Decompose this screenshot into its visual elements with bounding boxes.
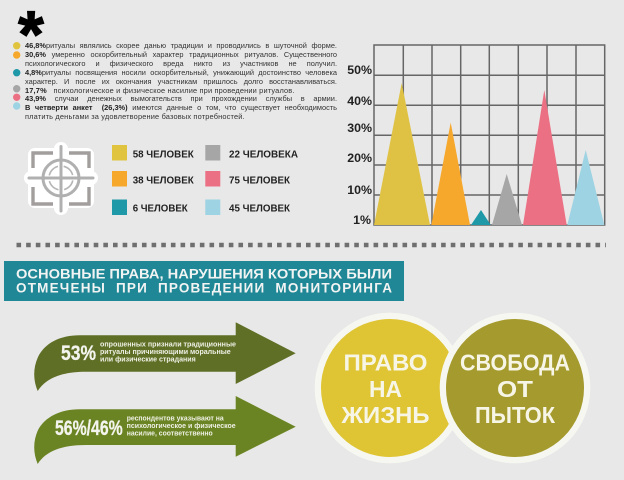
banner: section heading: [4, 261, 404, 301]
legend dots for notes: [13, 42, 20, 110]
text block: survey notes: 17,7% психологическое и физическое насилие при проведении ритуалов.: [25, 86, 295, 94]
chart: triangle percentages: 1%: [353, 213, 371, 227]
arrow: 53 percent: опрошенных признали традиционные: [100, 342, 236, 349]
legend: people counts: 45 ЧЕЛОВЕК: [229, 204, 291, 214]
arrow: 53 percent: ритуалы причиняющими моральные: [100, 349, 231, 356]
circle: right to life: ПРАВО: [344, 350, 428, 376]
text block: survey notes: 4,8%ритуалы посвящения носили оскорбительный, унижающий достоинство человека: [25, 68, 337, 77]
chart: triangle percentages: [347, 45, 605, 227]
text block: survey notes: В четверти анкет (26,3%) имеются данные о том, что существует необходимость: [25, 103, 337, 112]
icon: crosshair target: [28, 146, 94, 211]
text block: survey notes: [25, 41, 337, 120]
legend: people counts: 75 ЧЕЛОВЕК: [229, 176, 291, 186]
arrow: 53 percent: 53%: [61, 342, 96, 365]
circle: right to life: НА: [369, 376, 402, 402]
circle: right to life: [315, 313, 465, 463]
circle: freedom from torture: СВОБОДА: [460, 350, 570, 376]
circle: freedom from torture: ОТ: [497, 376, 533, 402]
text block: survey notes: 46,8%ритуалы являлись скорее данью традиции и проводились в шуточной форме.: [25, 41, 337, 50]
legend: people counts: 58 ЧЕЛОВЕК: [133, 150, 195, 160]
text block: survey notes: 30,6% умеренно оскорбительный характер традиционных ритуалов. Существенного: [25, 50, 337, 59]
chart: triangle percentages: 40%: [347, 94, 372, 108]
circle: right to life: ЖИЗНЬ: [340, 402, 430, 428]
arrow: 53 percent: или физические страдания: [100, 356, 196, 363]
banner: section heading: ОТМЕЧЕНЫ ПРИ ПРОВЕДЕНИИ МОНИТОРИНГА: [16, 280, 392, 296]
arrow: 56/46 percent: респондентов указывают на: [127, 416, 224, 423]
chart: triangle percentages: 50%: [347, 63, 372, 77]
circle: freedom from torture: ПЫТОК: [475, 402, 556, 428]
legend: people counts: [112, 145, 298, 215]
legend: people counts: 22 ЧЕЛОВЕКА: [229, 150, 298, 160]
text block: survey notes: 43,9% случаи денежных вымогательств при прохождении службы в армии.: [25, 94, 337, 103]
banner: section heading: ОСНОВНЫЕ ПРАВА, НАРУШЕНИЯ КОТОРЫХ БЫЛИ: [16, 266, 392, 282]
arrow: 53 percent: [34, 322, 296, 391]
text block: survey notes: характер. И после их окончания участникам пришлось долго восстанавливаться.: [25, 76, 337, 86]
legend: people counts: 6 ЧЕЛОВЕК: [133, 204, 189, 214]
circle: freedom from torture: [440, 313, 590, 463]
chart: triangle percentages: 30%: [347, 121, 372, 135]
legend: people counts: 38 ЧЕЛОВЕК: [133, 176, 195, 186]
arrow: 56/46 percent: насилие, соответственно: [127, 430, 213, 437]
arrow: 56/46 percent: психологическое и физическое: [127, 423, 236, 430]
arrow: 56/46 percent: 56%/46%: [55, 417, 123, 440]
text block: survey notes: психологического и физического вреда никто из участников не получил.: [25, 59, 337, 68]
text block: survey notes: платить деньгами за удовлетворение базовых потребностей.: [25, 112, 245, 120]
chart: triangle percentages: 20%: [347, 151, 372, 165]
chart: triangle percentages: 10%: [347, 183, 372, 197]
arrow: 56/46 percent: [34, 396, 296, 464]
